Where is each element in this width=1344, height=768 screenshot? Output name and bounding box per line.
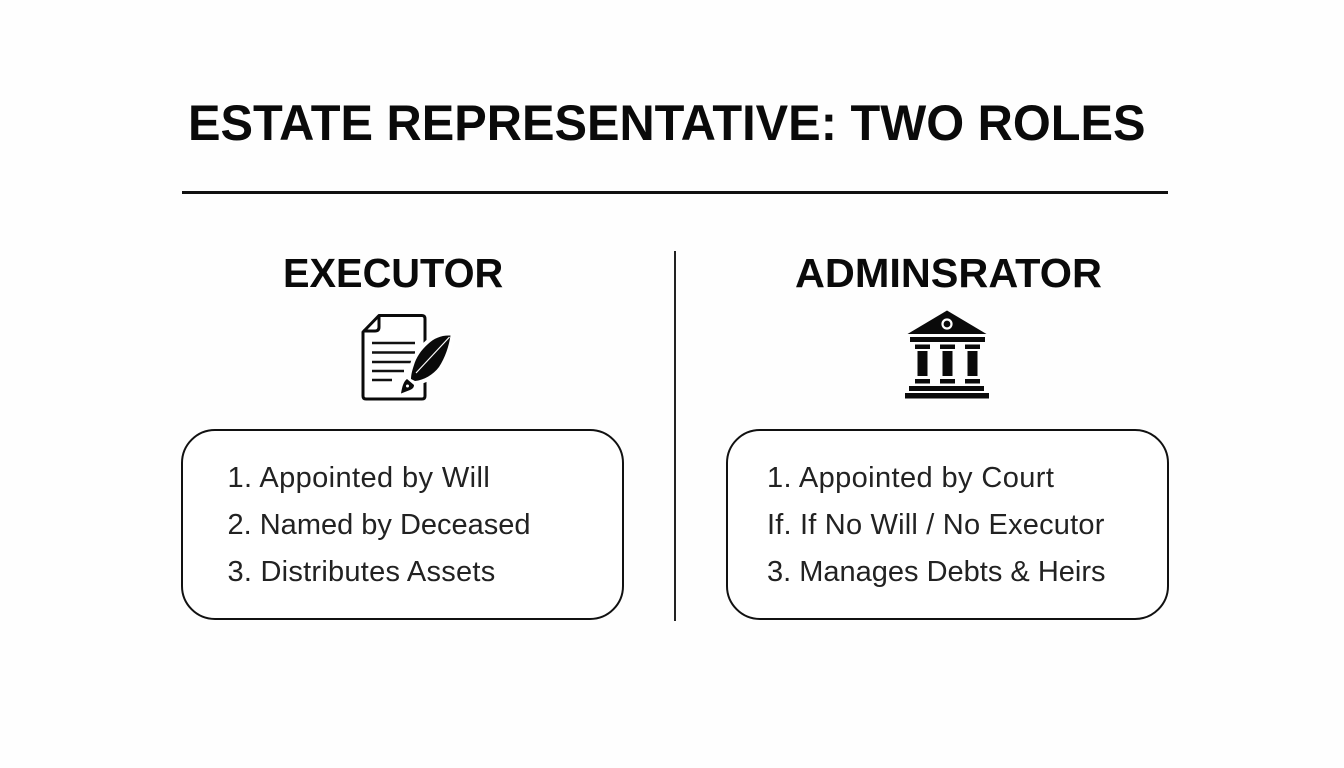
card: executor duties: [181, 429, 624, 620]
icon: courthouse: [905, 310, 989, 398]
title rule: [182, 191, 1168, 194]
list item 1: 1. Appointed by Court: [767, 462, 1054, 494]
icon: document with quill: [362, 314, 450, 400]
center divider: [674, 251, 676, 621]
list item 2: If. If No Will / No Executor: [767, 509, 1105, 541]
heading: administrator: ADMINSRATOR: [795, 250, 1102, 296]
panel: executor: [181, 250, 624, 620]
title: ESTATE REPRESENTATIVE: TWO ROLES: [188, 94, 1146, 151]
list item 3: 3. Manages Debts & Heirs: [767, 556, 1105, 588]
panel: administrator: [726, 250, 1169, 620]
list item 2: 2. Named by Deceased: [228, 509, 531, 541]
card: administrator duties: [726, 429, 1169, 620]
heading: executor: EXECUTOR: [283, 250, 503, 296]
list item 1: 1. Appointed by Will: [228, 462, 490, 494]
list item 3: 3. Distributes Assets: [228, 556, 495, 588]
